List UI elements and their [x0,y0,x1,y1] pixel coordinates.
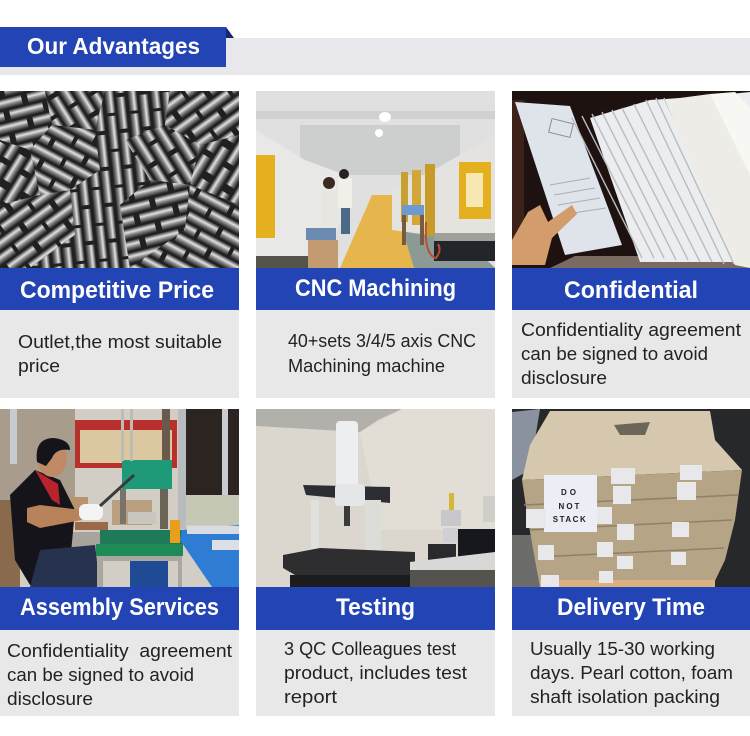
panel: Delivery Time: days. Pearl cotton, foam [530,662,733,683]
panel: Testing: Testing [336,594,415,621]
panel: Competitive Price: Competitive Price [20,277,214,304]
label: do not stack [544,475,597,532]
panel: Assembly Services: Assembly Services [20,594,219,621]
section header: Our Advantages [0,27,750,75]
label: do not stack: DO [561,488,579,497]
photo: CNC workshop [256,91,495,268]
panel: Testing: 3 QC Colleagues test [284,638,456,659]
panel: Confidential [512,91,750,398]
panel: Delivery Time: Usually 15-30 working [530,638,715,659]
panel: Testing: product, includes test [284,662,467,683]
photo: worker at assembly press [0,409,239,587]
photo: paper files on a shelf [512,91,750,268]
label: do not stack: NOT [559,502,581,511]
heading: Our Advantages: Our Advantages [27,33,200,59]
panel: Assembly Services [0,409,239,716]
panel: Confidential: can be signed to avoid [521,343,708,364]
photo: wrapped pallet of cartons [512,409,750,587]
panel: Confidential: Confidentiality agreement [521,319,741,340]
panel: CNC Machining: 40+sets 3/4/5 axis CNC [288,330,476,351]
panel: Delivery Time: Delivery Time [557,594,705,621]
photo: metal tubes [0,91,239,268]
panel: Confidential: disclosure [521,367,607,388]
panel: Assembly Services: disclosure [7,688,93,709]
panel: Competitive Price [0,91,239,398]
panel: Delivery Time: shaft isolation packing [530,686,720,707]
photo: coordinate measuring machine [256,409,495,587]
panel: Delivery Time [512,409,750,716]
panel: Competitive Price: price [18,355,60,376]
label: do not stack: STACK [553,515,587,524]
panel: Competitive Price: Outlet,the most suitable [18,331,222,352]
panel: Assembly Services: Confidentiality agreement [7,640,232,661]
panel: Confidential: Confidential [564,277,698,304]
panel: Assembly Services: can be signed to avoid [7,664,194,685]
panel: CNC Machining [256,91,495,398]
panel: CNC Machining: CNC Machining [295,275,456,302]
panel: CNC Machining: Machining machine [288,355,445,376]
panel: Testing: report [284,686,337,707]
panel: Testing [256,409,495,716]
